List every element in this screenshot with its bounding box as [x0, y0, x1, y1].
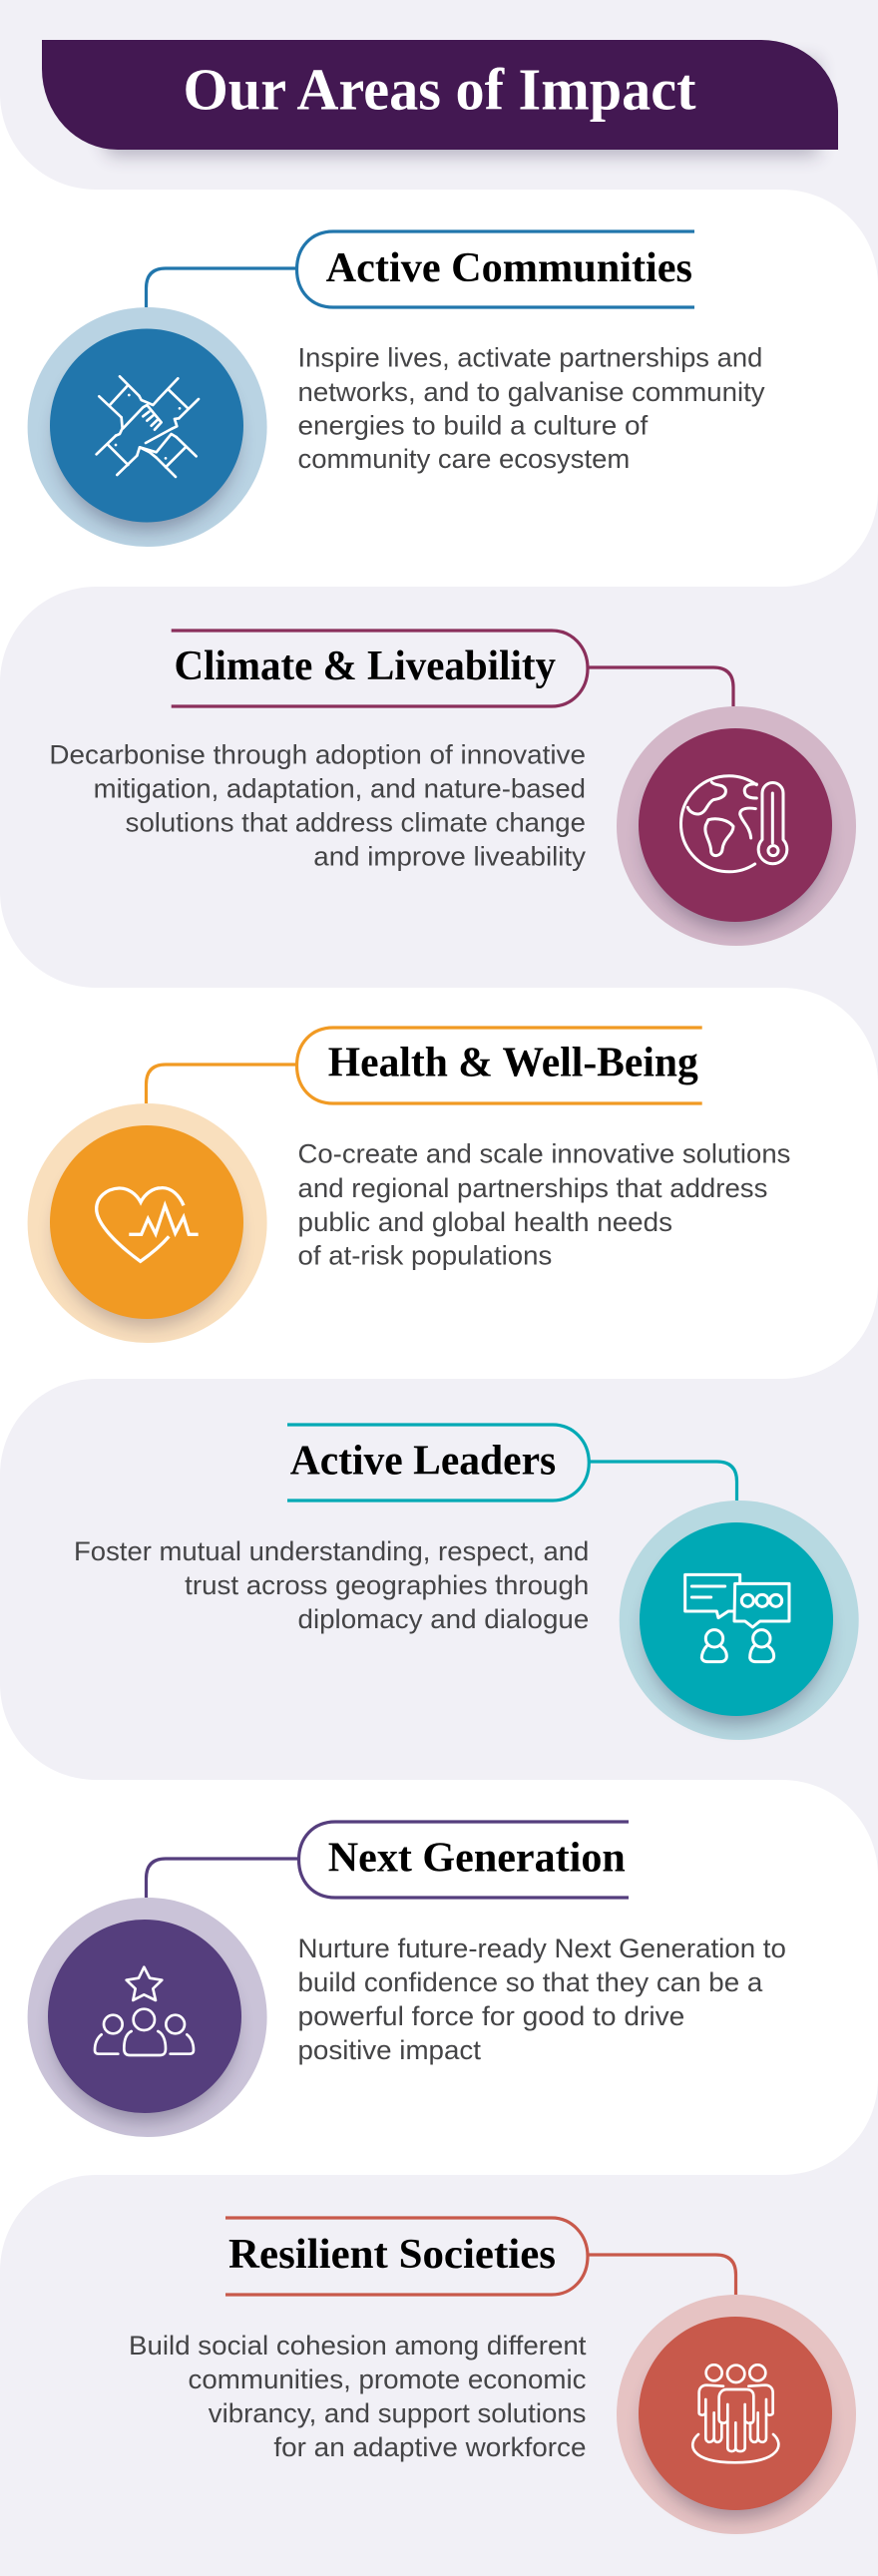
- panel: Next Generation: [0, 1780, 878, 2175]
- heading: Climate & Liveability: [174, 644, 556, 689]
- connector line: [588, 667, 733, 706]
- description: energies to build a culture of: [297, 411, 649, 441]
- icon badge: heart: [28, 1103, 267, 1343]
- heading pill: [287, 1425, 589, 1501]
- description: and regional partnerships that address: [297, 1173, 767, 1203]
- heading: Health & Well-Being: [328, 1041, 698, 1086]
- description: build confidence so that they can be a: [297, 1967, 763, 1997]
- description: positive impact: [297, 2035, 482, 2065]
- description: [297, 342, 765, 474]
- description: mitigation, adaptation, and nature-based: [94, 773, 586, 803]
- icon: heart with pulse: [97, 1188, 199, 1261]
- heading pill: [225, 2218, 588, 2295]
- description: communities, promote economic: [188, 2364, 587, 2394]
- heading pill: [297, 231, 694, 307]
- description: solutions that address climate change: [126, 807, 586, 837]
- description: [74, 1536, 589, 1634]
- icon: joined hands: [97, 376, 199, 477]
- description: Co-create and scale innovative solutions: [297, 1139, 790, 1169]
- connector line: [588, 2255, 736, 2295]
- description: for an adaptive workforce: [273, 2432, 587, 2462]
- description: [297, 1139, 790, 1271]
- description: diplomacy and dialogue: [297, 1604, 589, 1634]
- description: vibrancy, and support solutions: [209, 2398, 587, 2428]
- connector line: [146, 1859, 298, 1898]
- panel: Resilient Societies: [0, 2175, 878, 2576]
- description: and improve liveability: [313, 841, 587, 871]
- connector line: [146, 1065, 296, 1103]
- title: Our Areas of Impact: [184, 56, 696, 122]
- description: of at-risk populations: [297, 1241, 552, 1271]
- description: Nurture future-ready Next Generation to: [297, 1933, 786, 1963]
- heading pill: [297, 1028, 702, 1103]
- description: community care ecosystem: [297, 444, 630, 474]
- description: Inspire lives, activate partnerships and: [297, 342, 762, 372]
- description: powerful force for good to drive: [297, 2001, 684, 2031]
- icon: globe and thermometer: [680, 776, 787, 872]
- description: trust across geographies through: [185, 1570, 589, 1600]
- description: Build social cohesion among different: [129, 2331, 587, 2361]
- heading: Active Leaders: [290, 1438, 556, 1484]
- connector line: [589, 1462, 736, 1501]
- title banner: [42, 40, 838, 156]
- heading pill: [172, 631, 588, 706]
- icon badge: people and star: [28, 1898, 267, 2137]
- icon badge: hands: [28, 307, 267, 547]
- panel: Health & Well-Being: [0, 988, 878, 1379]
- description: Decarbonise through adoption of innovative: [49, 739, 586, 769]
- heading: Resilient Societies: [228, 2232, 556, 2278]
- description: [129, 2331, 587, 2462]
- icon: people in dialogue: [685, 1574, 789, 1662]
- icon badge: globe and thermometer: [617, 706, 856, 946]
- heading: Active Communities: [326, 245, 692, 291]
- panel: header background: [0, 0, 878, 190]
- icon: group of people: [692, 2364, 778, 2462]
- description: public and global health needs: [297, 1207, 672, 1237]
- icon badge: community: [617, 2295, 856, 2534]
- heading: Next Generation: [328, 1836, 626, 1882]
- description: [297, 1933, 786, 2065]
- description: [49, 739, 587, 871]
- description: networks, and to galvanise community: [297, 377, 765, 407]
- panel: Climate & Liveability: [0, 587, 878, 988]
- panel: Active Communities: [0, 190, 878, 587]
- description: Foster mutual understanding, respect, and: [74, 1536, 589, 1566]
- icon badge: dialogue: [620, 1501, 859, 1740]
- heading pill: [299, 1822, 629, 1898]
- connector line: [146, 268, 296, 307]
- icon: team with star: [95, 1967, 194, 2055]
- panel: Active Leaders: [0, 1379, 878, 1780]
